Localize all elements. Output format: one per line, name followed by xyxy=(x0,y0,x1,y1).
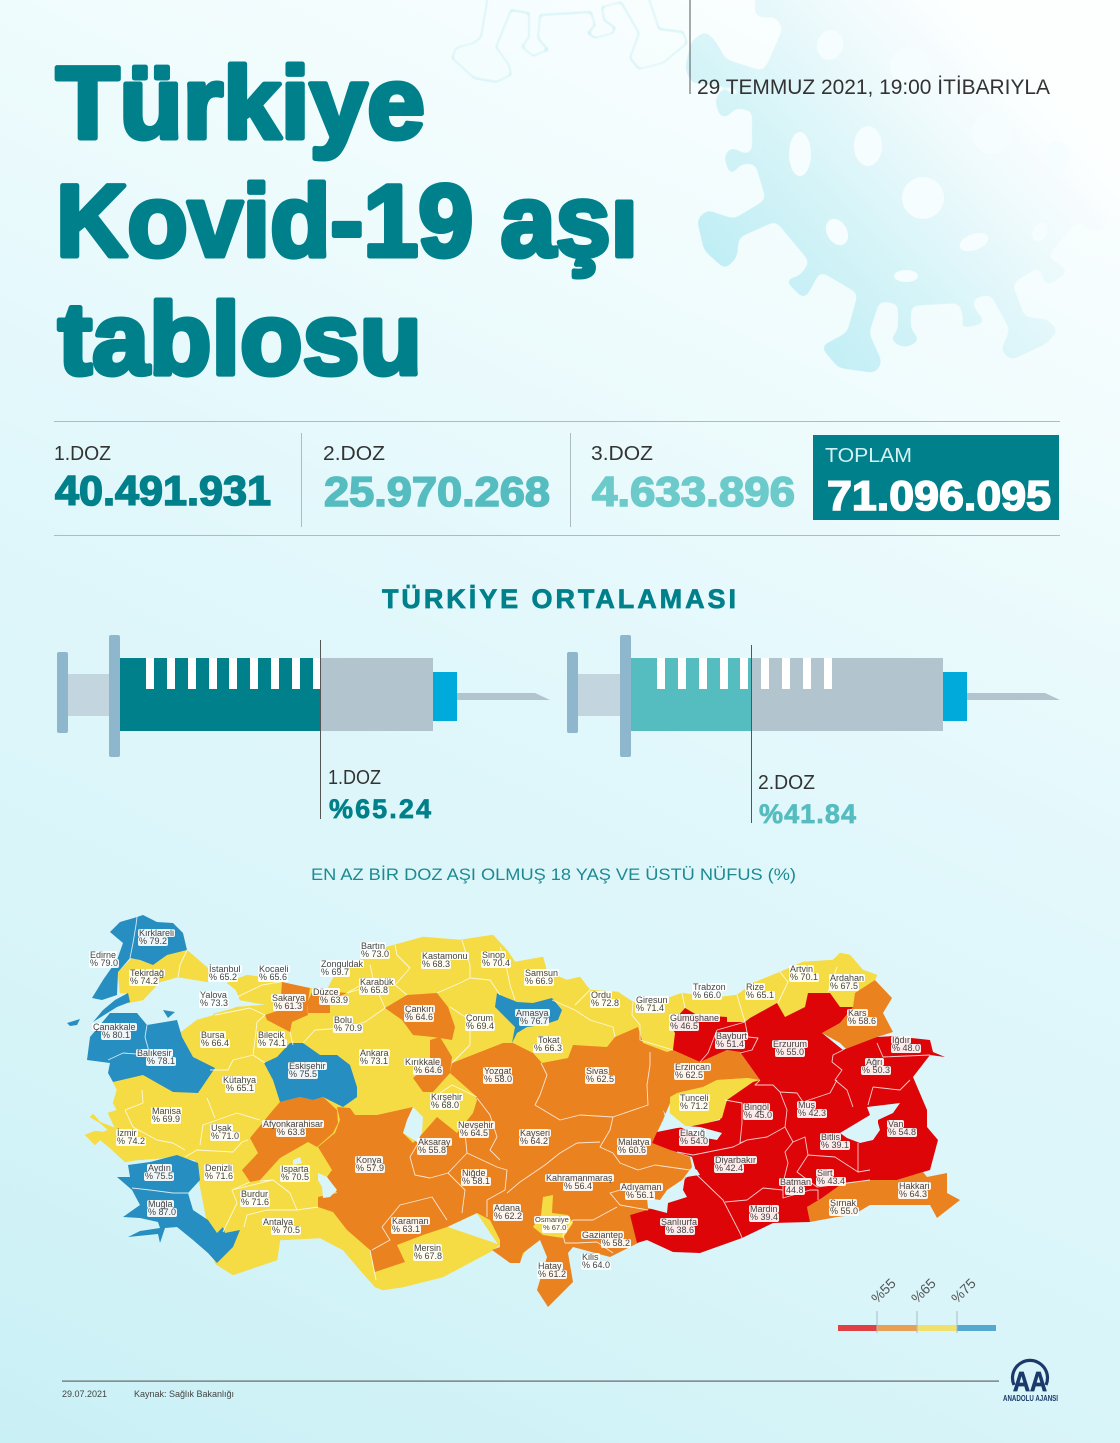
label: Bitlis: Bitlis xyxy=(821,1132,840,1142)
label: Ankara: Ankara xyxy=(360,1048,389,1058)
label: Ardahan: % 67.5 xyxy=(830,981,858,991)
label: Amasya: % 76.7 xyxy=(520,1016,548,1026)
label: Ardahan: Ardahan xyxy=(830,972,864,982)
stat: total box: TOPLAM xyxy=(825,445,912,467)
label: Kırıkkale xyxy=(404,1056,443,1075)
label: Bingöl: Bingöl xyxy=(744,1102,769,1112)
label: Kars xyxy=(847,1008,877,1026)
choropleth map of Turkey xyxy=(67,915,960,1307)
value label: 2nd dose percentage xyxy=(758,772,856,829)
label: Artvin xyxy=(789,964,819,982)
label: Kahramanmaraş xyxy=(545,1174,614,1191)
title: Kovid-19 aşı xyxy=(56,164,638,278)
label: Bolu: Bolu xyxy=(334,1014,352,1024)
label: Ağrı: % 50.3 xyxy=(862,1065,890,1075)
label: Muş: Muş xyxy=(798,1100,815,1110)
label: Manisa: % 69.9 xyxy=(152,1114,180,1124)
label: Bartın xyxy=(360,940,390,959)
label: Bolu: % 70.9 xyxy=(334,1023,362,1033)
label: Muş xyxy=(797,1100,827,1118)
label: Balıkesir: Balıkesir xyxy=(137,1048,172,1058)
label: Eskişehir: % 75.5 xyxy=(289,1069,317,1079)
label: Kırşehir xyxy=(430,1092,463,1110)
label: Kırşehir: % 68.0 xyxy=(431,1100,459,1110)
label: Hakkari: % 64.3 xyxy=(899,1189,927,1199)
title: tablosu xyxy=(58,282,422,396)
icon: Anadolu Ajansı logo: ANADOLU AJANSI xyxy=(1003,1394,1058,1403)
label: Osmaniye: % 67.0 xyxy=(543,1223,566,1232)
label: Van xyxy=(887,1120,917,1137)
label: Ankara: % 73.1 xyxy=(360,1056,388,1066)
label: Amasya xyxy=(515,1008,550,1026)
label: Ordu: % 72.8 xyxy=(591,998,619,1008)
label: Bingöl: % 45.0 xyxy=(744,1110,772,1120)
label: Bayburt xyxy=(715,1032,748,1049)
label: Adana xyxy=(493,1204,523,1221)
label: Kayseri: % 64.2 xyxy=(520,1136,548,1146)
label: Gümüşhane: Gümüşhane xyxy=(670,1012,719,1022)
label: Adıyaman: Adıyaman xyxy=(621,1182,662,1192)
label: Çankırı: % 64.6 xyxy=(405,1012,433,1022)
dose statistics panel xyxy=(54,421,1060,536)
label: Gaziantep xyxy=(581,1230,631,1248)
label: Muğla: Muğla xyxy=(148,1198,173,1208)
label: Mardin xyxy=(749,1204,779,1222)
label: Yozgat: Yozgat xyxy=(484,1066,511,1076)
label: Kırşehir: Kırşehir xyxy=(431,1092,462,1102)
label: Antalya xyxy=(262,1218,301,1235)
label: Kilis: Kilis xyxy=(582,1252,599,1262)
stat: total box xyxy=(813,435,1059,520)
label: Bursa: % 66.4 xyxy=(201,1038,229,1048)
label: Erzurum xyxy=(772,1040,808,1057)
label: Aksaray: % 55.8 xyxy=(418,1145,446,1155)
stat: 3rd dose: 3.DOZ xyxy=(591,443,653,465)
label: Yozgat: % 58.0 xyxy=(484,1074,512,1084)
label: Tunceli: % 71.2 xyxy=(680,1101,708,1111)
label: Muğla: % 87.0 xyxy=(148,1207,176,1217)
label: Isparta: Isparta xyxy=(281,1164,309,1174)
label: Kırklareli: % 79.2 xyxy=(139,936,167,946)
label: Gümüşhane: % 46.5 xyxy=(670,1021,698,1031)
label: Bartın: Bartın xyxy=(361,940,385,950)
syringe chart: second dose xyxy=(567,635,1060,829)
label: Kütahya: % 65.1 xyxy=(226,1083,254,1093)
label: Batman: 44.8 xyxy=(786,1185,804,1195)
label: Eskişehir: Eskişehir xyxy=(289,1060,326,1070)
footer and legend graphics xyxy=(0,1270,1120,1443)
label: Çankırı: Çankırı xyxy=(405,1004,434,1014)
label: Çanakkale xyxy=(92,1022,137,1040)
stat: 1st dose: 40.491.931 xyxy=(55,467,271,514)
label: Edirne xyxy=(89,950,119,968)
label: Isparta xyxy=(280,1164,310,1182)
label: Kocaeli: % 65.6 xyxy=(259,972,287,982)
label: Erzincan: % 62.5 xyxy=(675,1070,703,1080)
label: Rize: % 65.1 xyxy=(746,990,774,1000)
label: Ordu xyxy=(590,990,620,1008)
label: Adana: Adana xyxy=(494,1202,520,1212)
label: Zonguldak: % 69.7 xyxy=(321,967,349,977)
yellow Osmaniye xyxy=(533,1195,573,1238)
label: Uşak xyxy=(210,1122,240,1141)
label: Iğdır xyxy=(891,1036,921,1053)
legend: %75 xyxy=(948,1275,979,1306)
label: Aydın: % 75.5 xyxy=(145,1171,173,1181)
value label: 2nd dose percentage: 2.DOZ xyxy=(758,772,815,794)
stat: 3rd dose xyxy=(591,443,795,515)
label: İstanbul xyxy=(208,964,242,982)
label: Şanlıurfa: % 38.6 xyxy=(666,1225,694,1235)
label: Giresun: Giresun xyxy=(636,994,668,1004)
label: Kütahya: Kütahya xyxy=(223,1074,256,1084)
label: Van: Van xyxy=(888,1118,903,1128)
label: Ankara xyxy=(359,1048,390,1066)
label: Mardin: % 39.4 xyxy=(750,1212,778,1222)
label: Adana: % 62.2 xyxy=(494,1211,522,1221)
label: Mersin: % 67.8 xyxy=(414,1251,442,1261)
label: Mardin: Mardin xyxy=(750,1204,778,1214)
label: Kilis xyxy=(581,1252,611,1270)
label: Kahramanmaraş: % 56.4 xyxy=(564,1181,592,1191)
label: Muş: % 42.3 xyxy=(798,1108,826,1118)
label: Siirt: % 43.4 xyxy=(817,1176,845,1186)
label: Samsun: % 66.9 xyxy=(525,976,553,986)
label: Niğde xyxy=(461,1168,491,1186)
label: Trabzon: Trabzon xyxy=(693,982,726,992)
label: Şırnak xyxy=(829,1198,859,1216)
province borders xyxy=(108,917,930,1280)
label: İstanbul: İstanbul xyxy=(209,964,241,974)
red provinces xyxy=(630,993,945,1253)
label: Mersin: Mersin xyxy=(414,1242,441,1252)
label: Malatya: Malatya xyxy=(618,1136,650,1146)
syringe chart: first dose xyxy=(57,635,550,824)
label: Tunceli xyxy=(679,1094,710,1111)
label: Bingöl xyxy=(743,1102,773,1120)
label: Erzincan xyxy=(674,1062,711,1080)
label: Düzce xyxy=(312,986,349,1005)
map subtitle: EN AZ BİR DOZ AŞI OLMUŞ 18 YAŞ VE ÜSTÜ NÜFUS (%) xyxy=(311,865,796,884)
legend: %55 xyxy=(868,1275,899,1306)
map shapes xyxy=(67,915,960,1307)
label: Kastamonu: Kastamonu xyxy=(422,950,468,960)
label: Diyarbakır xyxy=(714,1156,757,1173)
label: Iğdır: Iğdır xyxy=(892,1034,910,1044)
label: Tokat: Tokat xyxy=(538,1034,560,1044)
label: Elazığ: % 54.0 xyxy=(680,1136,708,1146)
heading: Türkiye average: TÜRKİYE ORTALAMASI xyxy=(382,584,736,614)
label: Diyarbakır: % 42.4 xyxy=(715,1163,743,1173)
label: Kastamonu xyxy=(421,950,469,969)
yellow provinces base xyxy=(85,935,877,1290)
label: Denizli: % 71.6 xyxy=(205,1171,233,1181)
label: Zonguldak: Zonguldak xyxy=(321,958,363,968)
label: İzmir: % 74.2 xyxy=(117,1136,145,1146)
label: Sinop: % 70.4 xyxy=(482,958,510,968)
label: Amasya: Amasya xyxy=(516,1008,549,1018)
label: Aksaray xyxy=(417,1136,452,1155)
label: Kırklareli xyxy=(138,928,175,946)
label: Afyonkarahisar: % 63.8 xyxy=(277,1127,305,1137)
label: Sivas: % 62.5 xyxy=(586,1074,614,1084)
label: Kayseri xyxy=(519,1128,551,1146)
label: Sinop xyxy=(481,950,511,968)
legend xyxy=(838,1275,996,1333)
label: Burdur: Burdur xyxy=(241,1188,268,1198)
label: Yalova xyxy=(199,990,229,1008)
label: Elazığ: Elazığ xyxy=(680,1128,705,1138)
label: İzmir: İzmir xyxy=(117,1128,136,1138)
label: Adıyaman: % 56.1 xyxy=(626,1190,654,1200)
icon: outlined virus xyxy=(452,0,687,82)
label: Burdur xyxy=(240,1190,270,1207)
label: Balıkesir xyxy=(136,1048,176,1066)
label: Burdur: % 71.6 xyxy=(241,1197,269,1207)
label: Erzincan: Erzincan xyxy=(675,1062,710,1072)
label: Gaziantep: Gaziantep xyxy=(582,1230,623,1240)
footer rule xyxy=(62,1380,999,1382)
label: Edirne: % 79.0 xyxy=(90,958,118,968)
label: Kocaeli xyxy=(258,964,290,982)
label: Sakarya: % 61.3 xyxy=(274,1001,302,1011)
label: Bolu xyxy=(333,1014,363,1033)
footer date: 29.07.2021 xyxy=(62,1389,107,1399)
label: Hatay: Hatay xyxy=(538,1260,562,1270)
label: Kastamonu: % 68.3 xyxy=(422,959,450,969)
legend: %65 xyxy=(908,1275,939,1306)
label: Kırıkkale: % 64.6 xyxy=(414,1065,442,1075)
label: Tunceli: Tunceli xyxy=(680,1092,709,1102)
footer source: Kaynak: Sağlık Bakanlığı xyxy=(134,1389,234,1399)
label: Hakkari: Hakkari xyxy=(899,1180,930,1190)
label: Konya xyxy=(355,1154,385,1173)
date stamp: 29 TEMMUZ 2021, 19:00 İTİBARIYLA xyxy=(697,76,1050,99)
label: Elazığ xyxy=(679,1128,709,1146)
label: Şanlıurfa xyxy=(660,1218,698,1235)
label: Kocaeli: Kocaeli xyxy=(259,964,289,974)
label: Kayseri: Kayseri xyxy=(520,1128,550,1138)
label: Kahramanmaraş: Kahramanmaraş xyxy=(546,1172,613,1182)
label: Hatay: % 61.2 xyxy=(538,1269,566,1279)
label: Isparta: % 70.5 xyxy=(281,1172,309,1182)
label: Karabük xyxy=(359,976,395,995)
label: Sinop: Sinop xyxy=(482,950,505,960)
value label: 2nd dose percentage: %41.84 xyxy=(759,799,856,829)
label: Batman: Batman xyxy=(780,1176,811,1186)
label: Diyarbakır: Diyarbakır xyxy=(715,1154,756,1164)
label: Ağrı xyxy=(865,1058,891,1075)
icon: Anadolu Ajansı logo: AA xyxy=(1013,1366,1047,1397)
stat: 2nd dose: 25.970.268 xyxy=(324,468,550,515)
label: Kırıkkale: Kırıkkale xyxy=(405,1056,440,1066)
label: Siirt xyxy=(816,1168,846,1186)
label: Tekirdağ: % 74.2 xyxy=(130,976,158,986)
label: Balıkesir: % 78.1 xyxy=(147,1056,175,1066)
title: Türkiye xyxy=(56,46,425,160)
label: Manisa xyxy=(151,1106,182,1124)
label: Aydın: Aydın xyxy=(148,1162,171,1172)
label: Antalya: Antalya xyxy=(263,1216,293,1226)
label: Uşak: Uşak xyxy=(211,1122,232,1132)
value label: 1st dose percentage: %65.24 xyxy=(329,794,431,824)
label: Tekirdağ: Tekirdağ xyxy=(130,968,164,978)
label: Eskişehir xyxy=(288,1060,327,1079)
label: Niğde: Niğde xyxy=(462,1168,486,1178)
label: Bursa: Bursa xyxy=(201,1030,225,1040)
label: Yalova: % 73.3 xyxy=(200,998,228,1008)
label: Edirne: Edirne xyxy=(90,950,116,960)
label: Bayburt: Bayburt xyxy=(716,1030,747,1040)
label: Niğde: % 58.1 xyxy=(462,1176,490,1186)
label: Çorum: % 69.4 xyxy=(466,1021,494,1031)
stat: total box: 71.096.095 xyxy=(827,472,1051,519)
label: Sakarya: Sakarya xyxy=(272,992,305,1002)
label: Kars: % 58.6 xyxy=(848,1016,876,1026)
label: Erzurum: % 55.0 xyxy=(776,1047,804,1057)
label: Şırnak: % 55.0 xyxy=(830,1206,858,1216)
label: Ardahan xyxy=(829,974,865,991)
label: Düzce: Düzce xyxy=(313,986,339,996)
decorative background and header graphics xyxy=(54,0,1064,884)
label: Sivas: Sivas xyxy=(586,1066,608,1076)
label: Karabük: Karabük xyxy=(360,976,394,986)
value label: 1st dose percentage: 1.DOZ xyxy=(328,767,381,789)
label: Çorum: Çorum xyxy=(466,1012,493,1022)
label: Osmaniye xyxy=(534,1216,570,1233)
label: Bitlis: % 39.1 xyxy=(821,1140,849,1150)
stat: 1st dose: 1.DOZ xyxy=(54,443,111,465)
label: Bilecik: Bilecik xyxy=(258,1030,284,1040)
label: Afyonkarahisar: Afyonkarahisar xyxy=(263,1118,323,1128)
label: Muğla xyxy=(147,1200,177,1217)
label: Kütahya xyxy=(222,1074,257,1093)
label: Aksaray: Aksaray xyxy=(418,1136,451,1146)
icon: Anadolu Ajansı logo xyxy=(1003,1360,1058,1403)
label: Çorum xyxy=(465,1012,495,1031)
label: Zonguldak xyxy=(320,958,364,977)
label: Şırnak: Şırnak xyxy=(830,1198,856,1208)
blue provinces xyxy=(67,915,562,1263)
label: Bursa xyxy=(200,1030,230,1048)
label: Uşak: % 71.0 xyxy=(211,1131,239,1141)
label: Tokat: % 66.3 xyxy=(534,1043,562,1053)
label: Rize: Rize xyxy=(746,982,764,992)
label: Manisa: Manisa xyxy=(152,1106,181,1116)
label: Kars: Kars xyxy=(848,1008,867,1018)
label: Rize xyxy=(745,982,775,1000)
label: Artvin: Artvin xyxy=(790,964,813,974)
label: Trabzon xyxy=(692,982,727,1000)
label: Tekirdağ xyxy=(129,968,165,986)
label: Bitlis xyxy=(820,1132,850,1150)
label: Ağrı: Ağrı xyxy=(866,1056,883,1066)
stat: 2nd dose xyxy=(323,443,550,515)
label: Çankırı xyxy=(404,1004,435,1022)
icon: large virus xyxy=(686,0,1120,372)
label: Karaman: Karaman xyxy=(392,1216,429,1226)
stat: 3rd dose: 4.633.896 xyxy=(592,468,795,515)
label: Aydın xyxy=(144,1162,174,1181)
label: Denizli: Denizli xyxy=(205,1162,232,1172)
label: Erzurum: Erzurum xyxy=(773,1038,807,1048)
label: Mersin xyxy=(413,1244,443,1261)
label: Bartın: % 73.0 xyxy=(361,949,389,959)
stat: 2nd dose: 2.DOZ xyxy=(323,443,385,465)
label: Gaziantep: % 58.2 xyxy=(602,1238,630,1248)
label: Kırklareli: Kırklareli xyxy=(139,928,174,938)
label: Bayburt: % 51.4 xyxy=(716,1039,744,1049)
label: Nevşehir: % 64.5 xyxy=(460,1128,488,1138)
label: Osmaniye: Osmaniye xyxy=(535,1214,569,1224)
label: Malatya: % 60.6 xyxy=(618,1145,646,1155)
lakes xyxy=(293,1103,900,1213)
label: Van: % 54.8 xyxy=(888,1127,916,1137)
label: Batman xyxy=(779,1178,812,1195)
label: Hakkari xyxy=(898,1182,931,1199)
label: Karabük: % 65.8 xyxy=(360,985,388,995)
label: Kilis: % 64.0 xyxy=(582,1260,610,1270)
value label: 1st dose percentage xyxy=(328,767,431,824)
yellow Tunceli xyxy=(670,1078,748,1127)
title xyxy=(56,46,638,396)
label: Siirt: Siirt xyxy=(817,1168,832,1178)
label: Samsun: Samsun xyxy=(525,968,558,978)
label: Çanakkale: Çanakkale xyxy=(93,1022,136,1032)
label: Karaman: % 63.1 xyxy=(392,1224,420,1234)
label: Iğdır: % 48.0 xyxy=(892,1043,920,1053)
stat: 1st dose xyxy=(54,443,271,514)
label: Adıyaman xyxy=(620,1182,663,1200)
label: Afyonkarahisar xyxy=(262,1118,324,1137)
label: Şanlıurfa: Şanlıurfa xyxy=(661,1216,697,1226)
label: Artvin: % 70.1 xyxy=(790,972,818,982)
label: Sivas xyxy=(585,1066,615,1084)
label: Tokat xyxy=(537,1036,563,1053)
label: Yalova: Yalova xyxy=(200,990,227,1000)
label: Samsun xyxy=(524,968,559,986)
label: Bilecik xyxy=(257,1030,287,1048)
label: İstanbul: % 65.2 xyxy=(209,972,237,982)
label: Hatay xyxy=(537,1262,567,1279)
label: İzmir xyxy=(116,1128,146,1146)
label: Konya: Konya xyxy=(356,1154,382,1164)
label: Konya: % 57.9 xyxy=(356,1163,384,1173)
label: Gümüşhane xyxy=(669,1014,720,1031)
label: Yozgat xyxy=(483,1066,513,1084)
label: Çanakkale: % 80.1 xyxy=(102,1030,130,1040)
label: Malatya xyxy=(617,1138,651,1155)
label: Giresun xyxy=(635,996,669,1013)
orange provinces xyxy=(242,980,960,1307)
label: Antalya: % 70.5 xyxy=(272,1225,300,1235)
label: Trabzon: % 66.0 xyxy=(693,990,721,1000)
label: Denizli xyxy=(204,1162,234,1181)
label: Nevşehir xyxy=(457,1120,495,1138)
label: Giresun: % 71.4 xyxy=(636,1003,664,1013)
label: Karaman xyxy=(391,1216,430,1234)
label: Ordu: Ordu xyxy=(591,990,611,1000)
label: Bilecik: % 74.1 xyxy=(258,1038,286,1048)
label: Sakarya xyxy=(271,992,306,1011)
label: Nevşehir: Nevşehir xyxy=(458,1120,494,1130)
label: Düzce: % 63.9 xyxy=(320,995,348,1005)
